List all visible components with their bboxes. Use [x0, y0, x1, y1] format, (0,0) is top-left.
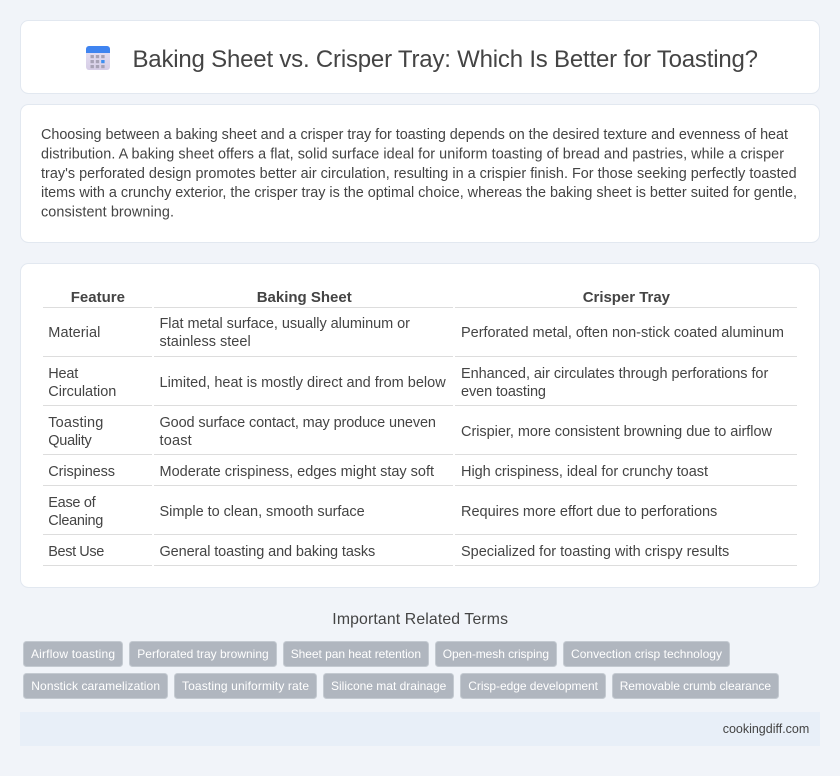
row: Heat Circulation: even toasting	[461, 384, 546, 400]
row: Toasting Quality: Crispier, more consistent browning due to airflow	[461, 424, 773, 440]
tag: Open-mesh crisping: Open-mesh crisping	[443, 647, 549, 661]
row: Heat Circulation: Circulation	[48, 384, 116, 400]
tag: Convection crisp technology: Convection crisp technology	[571, 647, 722, 661]
row: Material: Material	[48, 325, 100, 341]
tag: Nonstick caramelization	[24, 674, 168, 698]
heading: related terms: Important Related Terms	[332, 611, 508, 628]
row: Crispiness: Crispiness	[48, 464, 115, 480]
row: Crispiness: Moderate crispiness, edges might stay soft	[160, 464, 434, 480]
row: Toasting Quality: toast	[160, 433, 192, 449]
tag: Removable crumb clearance	[612, 674, 778, 698]
tag: Toasting uniformity rate: Toasting uniformity rate	[182, 679, 309, 693]
panel: comparison table	[20, 264, 820, 588]
icon: calendar grid	[86, 46, 110, 70]
header panel	[20, 20, 820, 94]
tag: Silicone mat drainage: Silicone mat drainage	[331, 679, 447, 693]
row: Ease of Cleaning	[48, 495, 717, 529]
tag: Removable crumb clearance: Removable crumb clearance	[620, 679, 771, 693]
row: Best Use: Best Use	[48, 544, 104, 560]
tag: Sheet pan heat retention: Sheet pan heat retention	[291, 647, 421, 661]
row: Material: stainless steel	[160, 334, 251, 350]
row: Best Use: Specialized for toasting with crispy results	[461, 544, 729, 560]
tag: Perforated tray browning: Perforated tray browning	[137, 647, 269, 661]
tag: Toasting uniformity rate	[174, 674, 316, 698]
intro paragraph: Choosing between a baking sheet and a crisper tray for toasting depends on the desired texture and evenness of heat	[41, 127, 788, 143]
row: Toasting Quality: Quality	[48, 433, 92, 449]
intro paragraph: distribution. A baking sheet offers a flat, solid surface ideal for uniform toasting of bread and pastries, while a crisper	[41, 146, 784, 162]
row: Crispiness: High crispiness, ideal for crunchy toast	[461, 464, 708, 480]
footer source: cookingdiff.com	[723, 722, 809, 736]
row: Toasting Quality	[48, 415, 773, 449]
row: Toasting Quality: Good surface contact, may produce uneven	[160, 415, 436, 431]
title: Baking Sheet vs. Crisper Tray: Which Is Better for Toasting?	[132, 46, 758, 73]
tag: Nonstick caramelization: Nonstick caramelization	[31, 679, 160, 693]
table header row: Baking Sheet	[257, 289, 352, 306]
intro paragraph: consistent browning.	[41, 204, 174, 220]
footer bar	[20, 712, 820, 746]
row: Material	[48, 316, 784, 350]
row: Ease of Cleaning: Requires more effort due to perforations	[461, 504, 717, 520]
row: Material: Flat metal surface, usually aluminum or	[160, 316, 410, 332]
row: Heat Circulation: Enhanced, air circulates through perforations for	[461, 366, 768, 382]
panel: introduction	[20, 104, 820, 242]
table header row: Crisper Tray	[583, 289, 671, 306]
tag: Airflow toasting	[24, 642, 122, 666]
tag: Convection crisp technology	[564, 642, 730, 666]
intro paragraph: tray's perforated design promotes better air circulation, resulting in a crispier finish. For those seeking perfectly toasted	[41, 166, 797, 182]
row: Heat Circulation	[48, 366, 768, 400]
tag: Silicone mat drainage	[324, 674, 454, 698]
tag: Perforated tray browning	[130, 642, 276, 666]
row: Crispiness	[48, 464, 708, 480]
table header row: Feature	[71, 289, 125, 306]
row: Material: Perforated metal, often non-stick coated aluminum	[461, 325, 784, 341]
tag: Crisp-edge development	[460, 674, 606, 698]
tag: Crisp-edge development: Crisp-edge development	[468, 679, 599, 693]
row: Best Use: General toasting and baking tasks	[160, 544, 375, 560]
intro paragraph: items with a crunchy exterior, the crisper tray is the optimal choice, whereas the baking sheet is better suited for gentle,	[41, 185, 797, 201]
related term tags	[24, 642, 778, 698]
intro paragraph	[41, 127, 797, 220]
row: Toasting Quality: Toasting	[48, 415, 103, 431]
row: Heat Circulation: Heat	[48, 366, 78, 382]
tag: Airflow toasting: Airflow toasting	[31, 647, 115, 661]
tag: Sheet pan heat retention	[284, 642, 428, 666]
row: Ease of Cleaning: Cleaning	[48, 513, 103, 529]
row: Ease of Cleaning: Ease of	[48, 495, 97, 511]
row: Best Use	[48, 544, 729, 560]
tag: Open-mesh crisping	[436, 642, 556, 666]
row: Heat Circulation: Limited, heat is mostly direct and from below	[160, 375, 446, 391]
row: Ease of Cleaning: Simple to clean, smooth surface	[160, 504, 365, 520]
table header row	[71, 289, 671, 306]
